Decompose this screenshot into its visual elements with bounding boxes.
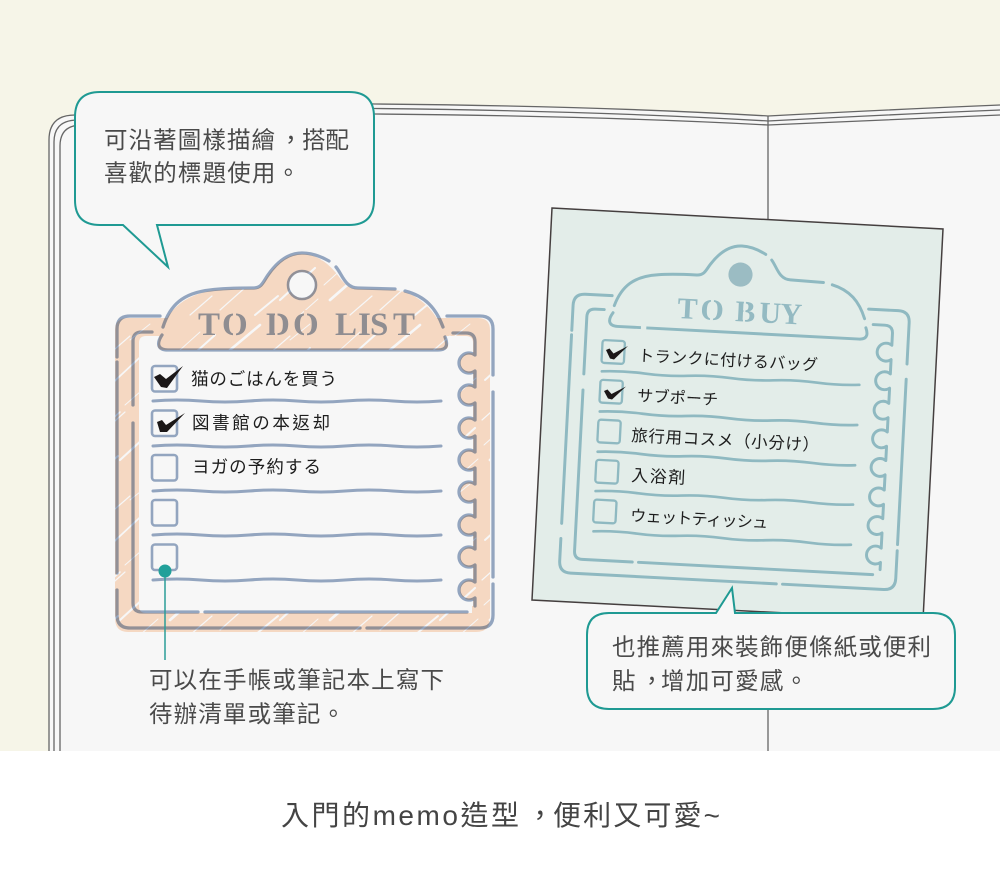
stencil outline: to do list	[117, 253, 493, 628]
callout: trace the pattern	[75, 92, 374, 267]
callout: sticky note use: ，	[640, 668, 664, 694]
coloured pencil fill	[115, 254, 490, 632]
footer caption: 便利又可愛~	[553, 800, 720, 831]
annotation text: 待辦清單或筆記。	[149, 701, 345, 727]
stencil outline: to buy	[559, 237, 913, 590]
note list text: サブポーチ	[637, 386, 719, 409]
footer caption: ，	[526, 800, 554, 831]
heading: to buy: TO BUY	[677, 292, 803, 332]
icon: stencil hole	[728, 262, 753, 287]
footer caption	[281, 800, 720, 831]
annotation text	[149, 667, 444, 727]
callout: trace the pattern: 喜歡的標題使用。	[104, 160, 300, 186]
callout: trace the pattern: 可沿著圖樣描繪	[104, 127, 275, 153]
pointer line with dot	[158, 564, 172, 660]
clipboard list text	[191, 369, 337, 477]
clipboard list text: ヨガの予約する	[192, 457, 321, 477]
footer caption: 入門的memo造型	[281, 800, 519, 831]
sticky note paper	[532, 208, 943, 620]
callout: trace the pattern: ，	[279, 127, 302, 153]
note list text: 旅行用コスメ（小分け）	[631, 426, 820, 455]
note checkmarks	[604, 346, 628, 400]
white footer band	[0, 751, 1000, 879]
clipboard list text: 猫のごはんを買う	[191, 369, 337, 389]
callout: sticky note use	[587, 588, 955, 709]
open notebook	[49, 103, 1000, 751]
clipboard checkmarks	[154, 366, 185, 432]
note list text: トランクに付けるバッグ	[638, 347, 818, 374]
callout: sticky note use: 也推薦用來裝飾便條紙或便利	[612, 634, 931, 660]
callout: trace the pattern: 搭配	[302, 127, 349, 153]
callout: sticky note use: 貼	[612, 668, 636, 694]
heading: to do list: TO DO LIST	[198, 307, 415, 343]
annotation text: 可以在手帳或筆記本上寫下	[149, 667, 444, 693]
note list text: ウェットティッシュ	[630, 507, 769, 532]
callout: sticky note use: 增加可愛感。	[661, 668, 808, 694]
clipboard list text: 図書館の本返却	[192, 413, 330, 433]
note list text: 入浴剤	[631, 466, 686, 488]
note list text	[630, 347, 820, 532]
